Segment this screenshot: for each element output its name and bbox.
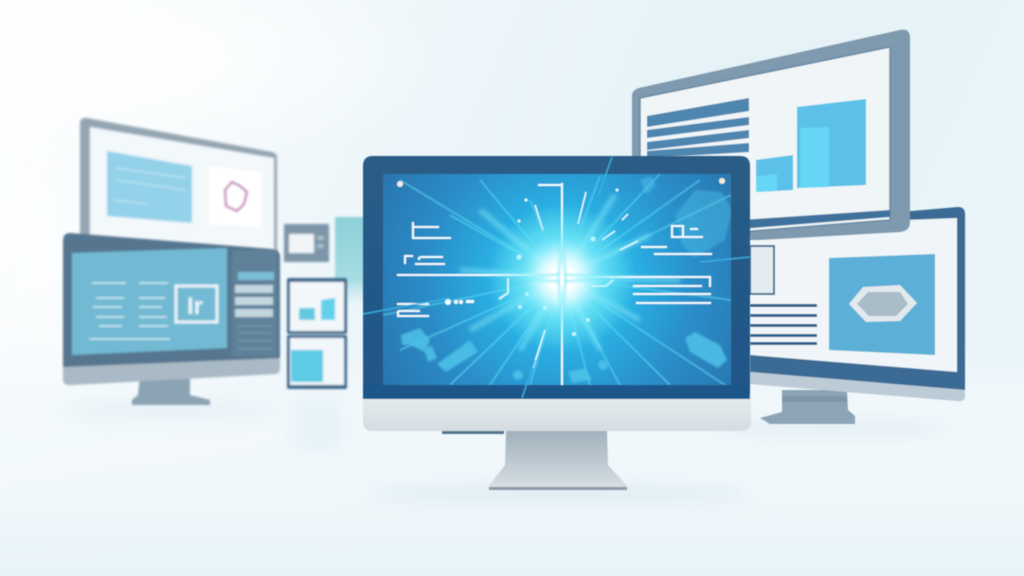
monitor: front right bbox=[750, 207, 965, 424]
screen bbox=[383, 174, 732, 385]
blue card bbox=[829, 254, 935, 355]
rays bbox=[383, 174, 731, 385]
blobs bbox=[401, 176, 732, 383]
text bars bbox=[647, 98, 749, 158]
light burst bbox=[491, 208, 633, 348]
monitor: small back middle bbox=[284, 224, 329, 262]
text lines bbox=[89, 283, 170, 339]
dots bbox=[397, 178, 725, 336]
icon box: Ir bbox=[187, 293, 203, 320]
screen bbox=[72, 248, 227, 355]
panel: left blue card bbox=[107, 151, 192, 223]
stand bbox=[132, 375, 210, 405]
panel: teal back screen bbox=[335, 217, 365, 307]
ui lines bbox=[397, 183, 712, 385]
stand bbox=[442, 431, 627, 490]
side menu bbox=[232, 250, 277, 356]
monitor: back right bbox=[632, 30, 910, 240]
monitor: front left bbox=[63, 233, 280, 405]
icon: hexagon bbox=[849, 285, 917, 322]
chin bbox=[363, 395, 751, 431]
monitor: center bbox=[363, 156, 751, 490]
long rays over bezel bbox=[363, 157, 750, 398]
bar chart squares bbox=[756, 99, 866, 192]
stand bbox=[760, 390, 855, 424]
floor shadows and reflections bbox=[60, 400, 950, 500]
tablets bbox=[287, 278, 347, 389]
screen bbox=[750, 218, 957, 372]
small card bbox=[750, 246, 774, 294]
text bars bbox=[750, 304, 817, 345]
chin bbox=[750, 372, 965, 401]
chin bbox=[63, 358, 280, 385]
monitor: back left bbox=[80, 118, 277, 260]
panel: white card with icon bbox=[209, 166, 262, 227]
dark band bbox=[740, 210, 890, 229]
icon box bbox=[176, 286, 217, 322]
bezel bbox=[363, 156, 750, 399]
